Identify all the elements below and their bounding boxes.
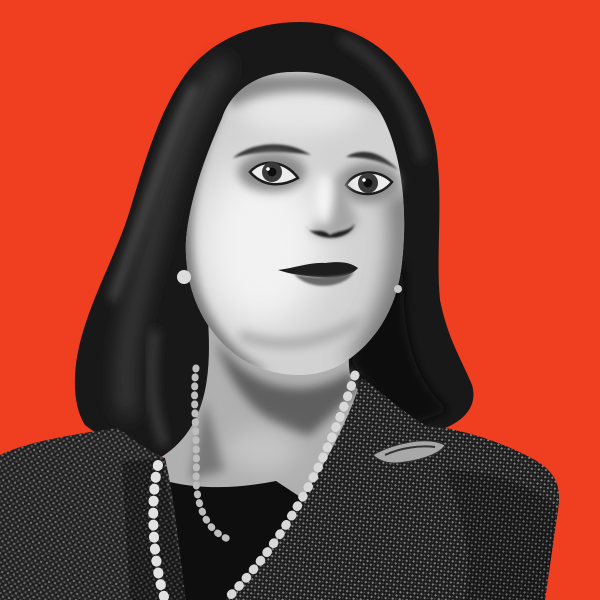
face <box>186 72 404 375</box>
right eyebrow <box>346 152 398 170</box>
lips <box>278 262 358 286</box>
right earring <box>394 285 402 293</box>
neck and chest <box>160 320 366 520</box>
jacket left <box>0 428 186 600</box>
hair <box>75 22 473 458</box>
brooch <box>373 441 445 463</box>
right eye <box>339 163 399 203</box>
left eyebrow <box>233 144 311 158</box>
left eye <box>238 152 306 192</box>
nose <box>305 174 358 238</box>
blouse <box>170 481 320 600</box>
jacket right <box>225 378 559 600</box>
left earring <box>177 270 191 284</box>
pearl necklace <box>153 368 355 600</box>
